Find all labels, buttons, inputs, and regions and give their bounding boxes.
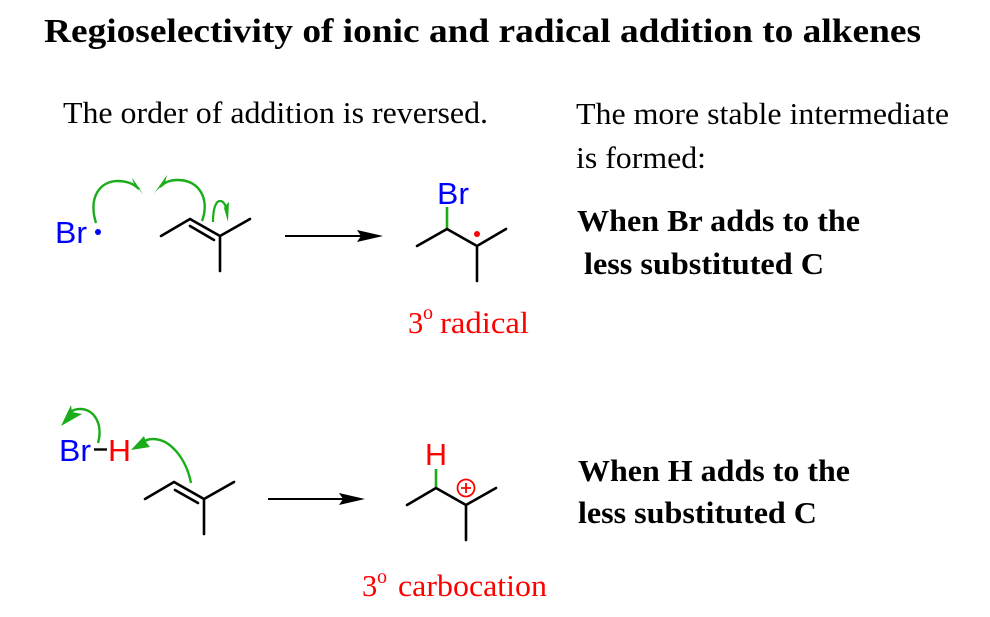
text: when Br adds: less substituted C: [584, 246, 824, 281]
text: when H adds: less substituted C: [578, 495, 817, 530]
label: 3 degree carbocation: o: [377, 566, 387, 588]
text: more stable intermediate: is formed:: [576, 141, 706, 175]
arrow: green from alkene to H: [131, 436, 191, 483]
reaction arrow: ionic: [268, 493, 365, 505]
text: more stable intermediate: [576, 97, 949, 175]
arrow: small green fishhook: [213, 201, 229, 222]
label: 3 degree carbocation: carbocation: [398, 569, 547, 603]
radical product: [417, 177, 506, 281]
label: 3 degree radical: o: [423, 302, 433, 324]
radical reactant: alkene: [161, 219, 250, 271]
label: 3 degree radical: 3: [408, 306, 423, 340]
text: when H adds: [578, 453, 850, 530]
carbocation product: H: [425, 438, 447, 472]
arrow: curved green from Br radical: [93, 178, 145, 223]
ionic reactant: HBr: Br: [59, 434, 91, 468]
ionic reactant: HBr: [59, 434, 131, 468]
title: Regioselectivity of ionic and radical addition to alkenes: [44, 13, 921, 50]
text: more stable intermediate: The more stable intermediate: [576, 97, 949, 131]
ionic reactant: HBr: H: [108, 434, 131, 468]
label: 3 degree carbocation: 3: [362, 569, 377, 603]
label: 3 degree radical: radical: [440, 306, 529, 340]
carbocation product: [407, 438, 496, 540]
radical product: Br: [437, 177, 469, 211]
radical reactant: Br radical: [55, 216, 101, 250]
ionic reactant: alkene: [145, 482, 234, 534]
text: order of addition reversed: The order of addition is reversed.: [63, 96, 488, 130]
text: when Br adds: When Br adds to the: [577, 203, 860, 238]
radical reactant: Br radical: Br: [55, 216, 87, 250]
label: 3 degree radical: [408, 302, 529, 340]
reaction arrow: radical: [285, 230, 383, 242]
text: when H adds: When H adds to the: [578, 453, 850, 488]
text: when Br adds: [577, 203, 860, 281]
arrow: green from H-Br bond to Br: [61, 405, 99, 443]
arrow: curved green from alkene pi bond: [153, 175, 205, 221]
